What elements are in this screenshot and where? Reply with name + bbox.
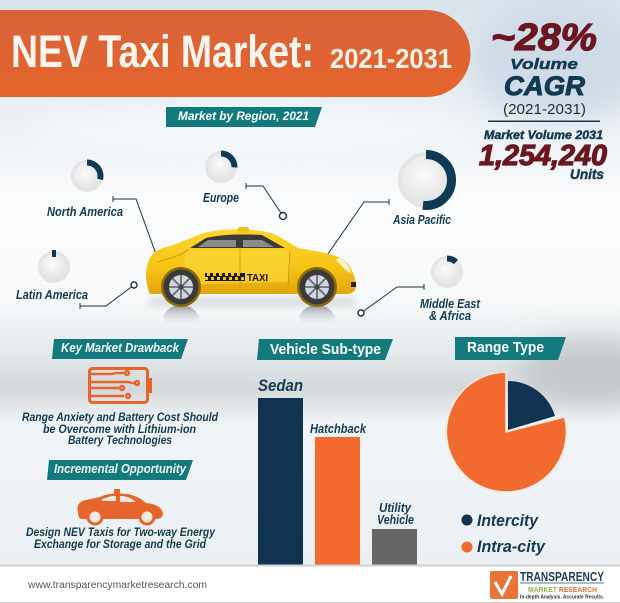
- bar: Utility Vehicle: [372, 501, 417, 566]
- panel: key market drawback: [22, 339, 219, 447]
- heading: range type: [455, 337, 566, 360]
- drawback text: Battery Technologies: [68, 433, 172, 447]
- bar: Sedan: Sedan: [258, 376, 303, 395]
- label: Asia Pacific: Asia Pacific: [392, 213, 451, 227]
- volume label: Volume: [510, 56, 578, 73]
- bar: Utility Vehicle: Vehicle: [377, 513, 414, 527]
- roof taxi sign: [238, 227, 249, 233]
- icon: orange taxi: [77, 489, 163, 524]
- taxi lettering: TAXI: [247, 273, 268, 284]
- checker stripe: [205, 273, 245, 281]
- drawback text: [22, 410, 219, 447]
- CAGR period: (2021-2031): [503, 101, 586, 118]
- heading: incremental opportunity: Incremental Opportunity: [54, 461, 187, 476]
- front wheel: [297, 267, 337, 307]
- bar: Hatchback: Hatchback: [310, 422, 367, 436]
- pie slice: intra-city: [446, 372, 566, 492]
- car reflection: [150, 299, 355, 328]
- label: Middle East and Africa: [420, 297, 481, 323]
- opportunity text: Exchange for Storage and the Grid: [34, 537, 207, 551]
- leader: Europe: [246, 183, 286, 220]
- logo: [490, 570, 605, 600]
- title text: NEV Taxi Market:: [11, 26, 314, 77]
- heading: incremental opportunity: [47, 460, 193, 480]
- donut: Latin America: [40, 250, 68, 282]
- taxi illustration: [146, 227, 356, 328]
- footer: [0, 564, 620, 603]
- label: Middle East and Africa: & Africa: [429, 309, 471, 323]
- bar: Sedan: [258, 376, 303, 566]
- title banner: [0, 10, 470, 97]
- units label: Units: [570, 166, 604, 182]
- car windows: [190, 234, 285, 248]
- leader: North America: [113, 196, 160, 260]
- CAGR stat block: [479, 17, 607, 182]
- heading: key market drawback: [52, 339, 188, 359]
- market volume value: 1,254,240: [479, 140, 607, 172]
- logo tagline: In-depth Analysis. Accurate Results.: [520, 594, 604, 600]
- heading: range type: Range Type: [467, 339, 544, 356]
- heading: key market drawback: Key Market Drawback: [61, 340, 180, 355]
- CAGR label: CAGR: [504, 71, 586, 101]
- donut: Europe: [206, 152, 236, 182]
- region heading: Market by Region, 2021: [178, 109, 309, 123]
- headlight: [336, 258, 351, 273]
- donut: North America: [72, 162, 102, 190]
- title years: 2021-2031: [330, 43, 452, 74]
- label: Latin America: Latin America: [16, 288, 88, 302]
- leader: Asia Pacific: [320, 199, 389, 264]
- label: Europe: Europe: [203, 191, 239, 205]
- panel: vehicle sub-type: [257, 339, 417, 566]
- leader: Latin America: [80, 282, 137, 309]
- panel: incremental opportunity: [26, 460, 216, 551]
- opportunity text: Design NEV Taxis for Two-way Energy: [26, 525, 216, 539]
- logo subtitle: MARKET RESEARCH: [528, 585, 597, 594]
- car body: [146, 229, 356, 294]
- heading: vehicle sub-type: Vehicle Sub-type: [270, 341, 381, 358]
- panel: range type: [446, 337, 566, 556]
- website url: www.transparencymarketresearch.com: [27, 580, 207, 591]
- drawback text: Range Anxiety and Battery Cost Should: [22, 410, 219, 424]
- icon: battery circuit: [90, 368, 152, 402]
- pie chart: [446, 372, 566, 492]
- pie slice: intercity: [508, 381, 555, 430]
- label: North America: North America: [47, 205, 123, 219]
- door seams: [158, 249, 290, 291]
- bar: Hatchback: [310, 422, 367, 566]
- rear wheel: [161, 267, 201, 307]
- CAGR percent: ~28%: [491, 17, 597, 59]
- donut: Asia Pacific: [400, 154, 452, 206]
- bar: Utility Vehicle: Utility: [379, 501, 412, 515]
- opportunity text: [26, 525, 216, 551]
- leader: Middle East and Africa: [358, 284, 424, 316]
- legend: intercity: Intercity: [477, 511, 539, 530]
- market volume label: Market Volume 2031: [484, 128, 603, 142]
- car door highlight: [185, 250, 290, 284]
- donut: Middle East and Africa: [432, 258, 462, 286]
- region heading: [166, 107, 322, 127]
- legend: intra-city: Intra-city: [477, 537, 546, 556]
- logo mark: [490, 571, 518, 599]
- drawback text: be Overcome with Lithium-ion: [43, 422, 196, 436]
- label: Middle East and Africa: Middle East: [420, 297, 481, 311]
